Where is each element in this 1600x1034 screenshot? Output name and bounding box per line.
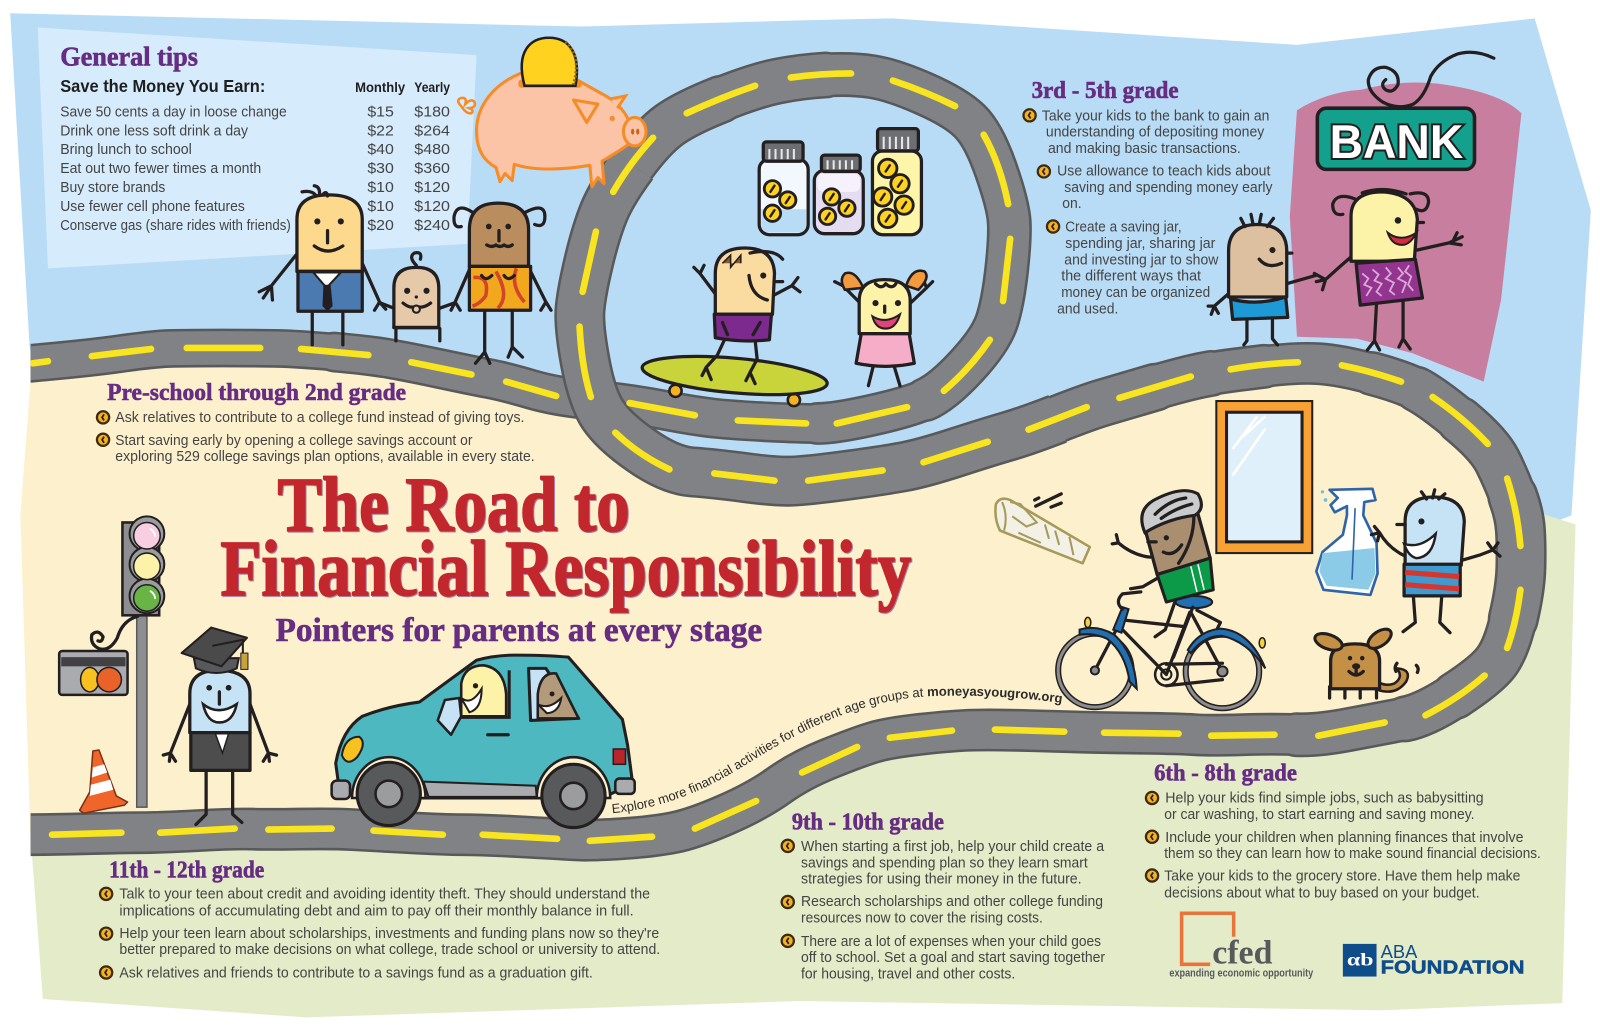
- table: save the money you earn: $22: [367, 123, 394, 139]
- text: 3rd-5th grade tips: on.: [1062, 196, 1082, 212]
- text: 9th-10th grade tips: savings and spending plan so they learn smart: [801, 855, 1088, 871]
- logo: ABA Foundation: ABA: [1381, 941, 1418, 962]
- text: 6th-8th grade tips: or car washing, to start earning and saving money.: [1164, 807, 1474, 823]
- icon: piggy bank: [458, 38, 646, 187]
- character: child holding hands: [1208, 214, 1315, 345]
- text: 3rd-5th grade tips: and making basic transactions.: [1048, 141, 1241, 157]
- background: road-side cream: [20, 348, 1520, 847]
- icon: credit card: [59, 616, 138, 695]
- logo: cfed: cfed: [1212, 934, 1273, 971]
- text: 3rd-5th grade tips: [1023, 108, 1273, 317]
- logo: cfed: expanding economic opportunity: [1169, 968, 1313, 980]
- table: save the money you earn: Yearly: [414, 80, 450, 96]
- text: 3rd-5th grade tips: Take your kids to the bank to gain an: [1042, 108, 1269, 124]
- character: cyclist on bicycle: [1058, 491, 1265, 708]
- icon: bank sign: BANK: [1330, 116, 1463, 168]
- table: save the money you earn: Drink one less soft drink a day: [60, 123, 249, 139]
- text: 9th-10th grade tips: off to school. Set a goal and start saving together: [801, 950, 1105, 966]
- table: save the money you earn: Use fewer cell phone features: [60, 199, 245, 215]
- general tips heading: General tips: [60, 40, 198, 71]
- text: 6th-8th grade tips: Take your kids to the grocery store. Have them help make: [1164, 869, 1520, 885]
- heading: 6th-8th grade: 6th - 8th grade: [1154, 760, 1297, 787]
- character: child cleaning: [1371, 490, 1500, 633]
- heading: 9th-10th grade: 9th - 10th grade: [792, 809, 944, 836]
- table: save the money you earn: $120: [414, 180, 450, 196]
- text: 11th-12th grade tips: implications of accumulating debt and aim to pay off their monthly balance in full.: [119, 903, 634, 919]
- driver: [461, 665, 506, 716]
- building: pink bank backdrop: [1290, 83, 1521, 382]
- table: save the money you earn: $480: [414, 142, 450, 158]
- panel: general tips background: [38, 28, 477, 268]
- road: [20, 73, 1521, 841]
- table: save the money you earn: Monthly: [355, 80, 405, 96]
- text: pre-school tips: Ask relatives to contribute to a college fund instead of giving toys.: [115, 410, 524, 426]
- table: save the money you earn: $240: [414, 218, 450, 234]
- text: 3rd-5th grade tips: Create a saving jar,: [1065, 220, 1182, 236]
- heading: 11th-12th grade: 11th - 12th grade: [109, 857, 264, 884]
- table: save the money you earn: $180: [414, 104, 450, 120]
- text: 3rd-5th grade tips: understanding of depositing money: [1046, 125, 1265, 141]
- title: The Road to: [278, 462, 630, 548]
- character: father: [259, 186, 386, 345]
- text: 6th-8th grade tips: them so they can learn how to make sound financial decisions.: [1164, 846, 1541, 862]
- character: boy on skateboard: [641, 248, 829, 406]
- text: pre-school tips: exploring 529 college savings plan options, available in every state.: [115, 449, 535, 465]
- table: save the money you earn: Save the Money You Earn:: [60, 76, 265, 96]
- heading: pre-school: Pre-school through 2nd grade: [107, 379, 406, 406]
- icon: newspaper: [995, 494, 1090, 563]
- table: save the money you earn: $120: [414, 199, 450, 215]
- text: 3rd-5th grade tips: the different ways that: [1061, 269, 1201, 285]
- logo: cfed: [1169, 913, 1313, 980]
- curved text: website note: Explore more financial activities for different age groups at moneyasyougrow.org: [612, 688, 1062, 814]
- text: 9th-10th grade tips: for housing, travel and other costs.: [801, 967, 1015, 983]
- table: save the money you earn: $10: [367, 199, 394, 215]
- text: 6th-8th grade tips: Help your kids find simple jobs, such as babysitting: [1165, 790, 1484, 806]
- background: sky: [10, 13, 1591, 571]
- icon: coin jars: [759, 129, 921, 235]
- character: mother: [451, 203, 551, 363]
- table: save the money you earn: $360: [414, 161, 450, 177]
- text: 11th-12th grade tips: Ask relatives and friends to contribute to a savings fund as a graduation gift.: [119, 966, 593, 982]
- table: save the money you earn: $20: [367, 218, 394, 234]
- icon: spray bottle: [1316, 489, 1378, 595]
- text: 6th-8th grade tips: Include your children when planning finances that involve: [1165, 830, 1523, 846]
- table: save the money you earn: [60, 76, 450, 234]
- table: save the money you earn: Buy store brands: [60, 180, 165, 196]
- jar 2: [814, 155, 863, 234]
- jar 3: [872, 129, 921, 235]
- title: [220, 462, 911, 613]
- character: mother at bank: [1314, 190, 1462, 350]
- character: baby: [381, 253, 454, 341]
- text: 11th-12th grade tips: better prepared to make decisions on what college, trade school or university to attend.: [119, 942, 660, 958]
- heading: 3rd-5th grade: 3rd - 5th grade: [1032, 77, 1179, 104]
- subtitle: Pointers for parents at every stage: [276, 612, 762, 649]
- text: 9th-10th grade tips: resources now to cover the rising costs.: [801, 910, 1043, 926]
- text: 3rd-5th grade tips: and investing jar to show: [1064, 252, 1219, 268]
- icon: mirror: [1216, 401, 1312, 553]
- jar 1: [759, 142, 808, 235]
- text: 11th-12th grade tips: Talk to your teen about credit and avoiding identity theft. They should understand the: [119, 886, 650, 902]
- table: save the money you earn: $264: [414, 123, 450, 139]
- background: grass: [31, 510, 1576, 1017]
- table: save the money you earn: Save 50 cents a day in loose change: [60, 104, 287, 120]
- table: save the money you earn: $40: [367, 142, 394, 158]
- text: 9th-10th grade tips: [782, 839, 1105, 983]
- table: save the money you earn: $10: [367, 180, 394, 196]
- text: 11th-12th grade tips: Help your teen learn about scholarships, investments and funding plans now so they're: [119, 926, 659, 942]
- table: save the money you earn: Conserve gas (share rides with friends): [60, 218, 291, 234]
- title: Financial Responsibility: [220, 525, 911, 613]
- text: 9th-10th grade tips: Research scholarships and other college funding: [801, 894, 1103, 910]
- logo: ABA Foundation: [1343, 941, 1524, 977]
- text: 9th-10th grade tips: When starting a first job, help your child create a: [801, 839, 1105, 855]
- icon: traffic cone: [80, 750, 128, 813]
- icon: bank sign: [1317, 52, 1494, 169]
- text: 6th-8th grade tips: [1146, 790, 1541, 901]
- text: 3rd-5th grade tips: spending jar, sharing jar: [1065, 236, 1215, 252]
- table: save the money you earn: $30: [367, 161, 394, 177]
- text: 3rd-5th grade tips: money can be organized: [1061, 285, 1210, 301]
- text: 9th-10th grade tips: strategies for using their money in the future.: [801, 872, 1082, 888]
- text: 11th-12th grade tips: [100, 886, 660, 982]
- text: pre-school tips: [97, 410, 535, 465]
- bicycle: [1058, 592, 1265, 708]
- character: dog: [1313, 625, 1418, 698]
- logo: ABA Foundation: αb: [1347, 949, 1373, 969]
- table: save the money you earn: Bring lunch to school: [60, 142, 192, 158]
- table: save the money you earn: $15: [367, 104, 394, 120]
- text: 3rd-5th grade tips: saving and spending money early: [1064, 180, 1273, 196]
- logo: ABA Foundation: FOUNDATION: [1381, 956, 1524, 977]
- text: 3rd-5th grade tips: and used.: [1057, 301, 1118, 317]
- table: save the money you earn: Eat out two fewer times a month: [60, 161, 261, 177]
- text: pre-school tips: Start saving early by opening a college savings account or: [115, 433, 473, 449]
- icon: teal car with driver and passenger: [332, 655, 635, 828]
- text: 9th-10th grade tips: There are a lot of expenses when your child goes: [801, 934, 1101, 950]
- character: girl with pigtails: [835, 271, 933, 386]
- passenger: [538, 673, 579, 718]
- text: 6th-8th grade tips: decisions about what to buy based on your budget.: [1164, 885, 1480, 901]
- icon: traffic light: [122, 516, 164, 807]
- text: 3rd-5th grade tips: Use allowance to teach kids about: [1057, 164, 1270, 180]
- character: graduate: [163, 628, 277, 824]
